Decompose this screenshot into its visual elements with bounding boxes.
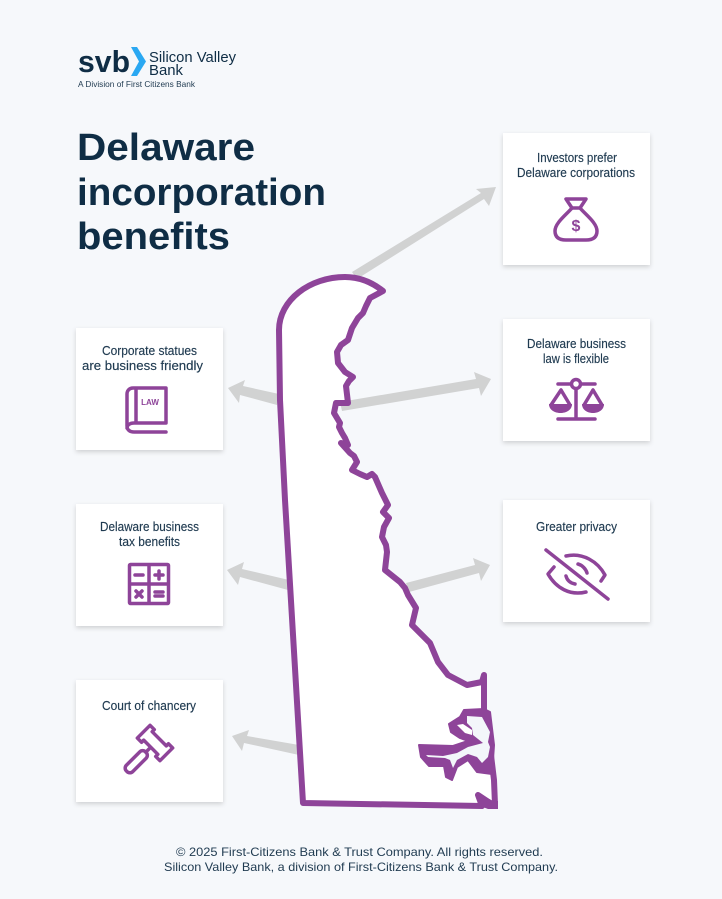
- bay: inner water: [426, 716, 490, 768]
- icon: money bag: $: [572, 218, 581, 235]
- logo: Silicon Valley Bank: [78, 44, 236, 89]
- panel: greater privacy: [503, 500, 650, 622]
- icon: law book: [127, 388, 166, 432]
- arrow: to corporate statutes: [228, 380, 279, 405]
- bay: upper inlet: [457, 724, 472, 735]
- arrow: to court of chancery: [232, 730, 299, 755]
- logo: Silicon Valley Bank: A Division of First Citizens Bank: [78, 79, 196, 89]
- panel: court of chancery: Court of chancery: [102, 699, 197, 713]
- panel: Delaware business tax benefits: Delaware business: [100, 520, 199, 534]
- footer: copyright: [164, 845, 558, 874]
- title: [77, 127, 326, 258]
- arrow: to investors prefer Delaware corporations: [352, 187, 496, 279]
- footer: copyright: Silicon Valley Bank, a division of First-Citizens Bank & Trust Company.: [164, 860, 558, 874]
- title: benefits: [77, 216, 230, 258]
- panel: Delaware business tax benefits: [76, 504, 223, 626]
- icon: scales: [549, 380, 604, 419]
- panel: corporate statutes are business friendly: Corporate statues: [102, 344, 197, 358]
- bay: Indian River and Rehoboth: [419, 709, 494, 780]
- panel: Delaware business law is flexible: [503, 319, 650, 441]
- map: southeast corner: [478, 793, 498, 809]
- arrow: to greater privacy: [406, 558, 490, 592]
- panel: investors prefer Delaware corporations: [503, 133, 650, 265]
- logo: Silicon Valley Bank: Bank: [149, 62, 183, 79]
- title: Delaware: [77, 127, 255, 169]
- logo: Silicon Valley Bank: svb: [78, 44, 130, 79]
- icon: crossed-out eye: [546, 550, 608, 599]
- footer: copyright: © 2025 First-Citizens Bank & Trust Company. All rights reserved.: [176, 845, 543, 859]
- icon: gavel: [115, 725, 173, 783]
- panel: investors prefer Delaware corporations: Investors prefer: [537, 151, 617, 165]
- map: Delaware state outline: [279, 277, 498, 809]
- arrow: to tax benefits: [227, 562, 289, 590]
- panel: corporate statutes are business friendly: are business friendly: [82, 359, 204, 373]
- title: incorporation: [77, 172, 326, 214]
- arrow: to Delaware business law: [340, 372, 491, 411]
- icon: money bag: [555, 199, 597, 240]
- panel: Delaware business law is flexible: law is flexible: [543, 352, 609, 366]
- panel: corporate statutes are business friendly: [76, 328, 223, 450]
- icon: calculator: [130, 564, 168, 604]
- logo: Silicon Valley Bank: Silicon Valley: [149, 49, 236, 66]
- panel: court of chancery: [76, 680, 223, 802]
- panel: Delaware business law is flexible: Delaware business: [527, 337, 626, 351]
- icon: law book: LAW: [141, 398, 159, 407]
- panel: investors prefer Delaware corporations: Delaware corporations: [517, 166, 635, 180]
- panel: greater privacy: Greater privacy: [536, 520, 618, 534]
- panel: Delaware business tax benefits: tax benefits: [119, 535, 180, 549]
